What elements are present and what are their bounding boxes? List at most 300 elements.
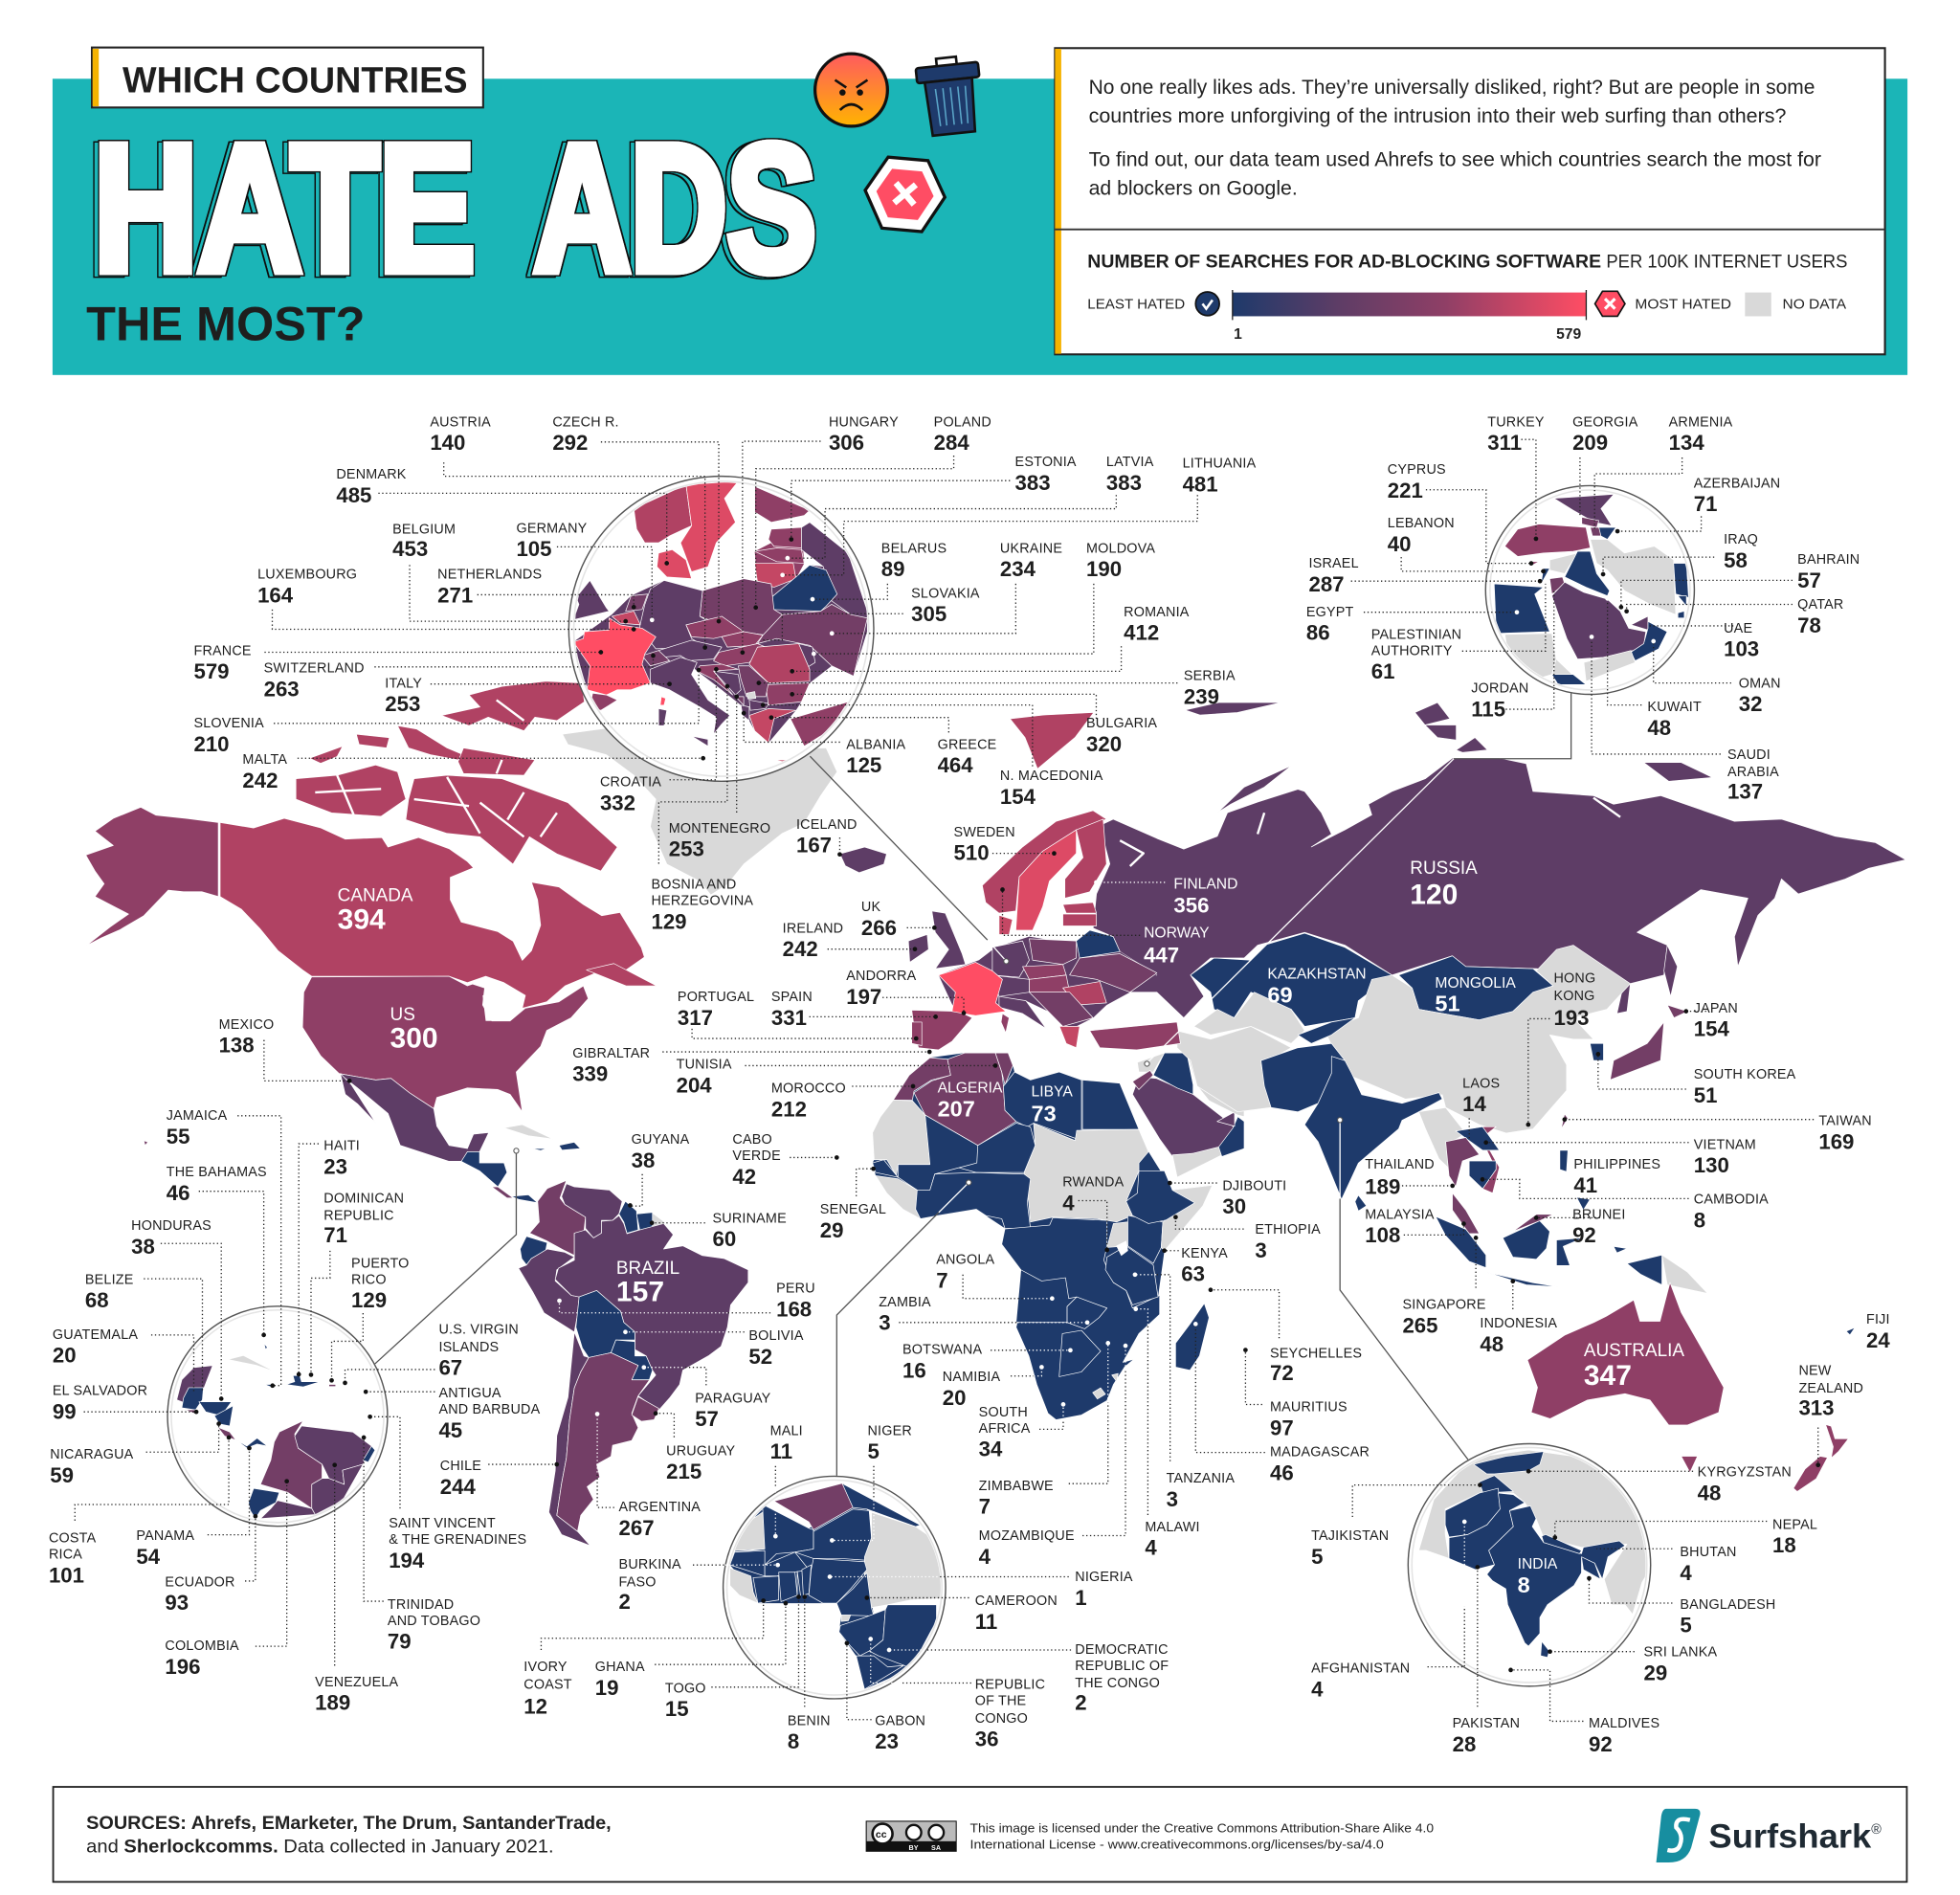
logo: Surfshark: ®: [1871, 1822, 1882, 1838]
label: Singapore: 265: [1402, 1313, 1437, 1337]
label: Montenegro: MONTENEGRO: [669, 821, 770, 836]
label: Bangladesh: BANGLADESH: [1680, 1597, 1776, 1613]
label: Puerto Rico: PUERTO: [351, 1256, 410, 1271]
label: Belarus: 89: [881, 557, 905, 581]
panel: intro and legend: No one really likes ads. They’re universally disliked, right? But are people in some: [1089, 77, 1815, 99]
label: Mexico: 138: [219, 1034, 255, 1058]
label: Afghanistan: 4: [1311, 1677, 1324, 1701]
header band: [53, 78, 1907, 375]
label: Honduras: 38: [131, 1235, 155, 1259]
label: Qatar: 78: [1797, 613, 1821, 637]
label: Guatemala: GUATEMALA: [53, 1327, 138, 1343]
label: Seychelles: 72: [1270, 1361, 1294, 1385]
label: Taiwan: 169: [1818, 1129, 1854, 1153]
label: Indonesia: 48: [1480, 1332, 1503, 1356]
label: Portugal: 317: [678, 1006, 713, 1030]
label: Hong Kong: 193: [1553, 1006, 1590, 1030]
label: Iraq: IRAQ: [1724, 532, 1758, 547]
label: Philippines: 41: [1573, 1173, 1597, 1197]
label: Australia: 347: [1584, 1360, 1632, 1392]
label: Kuwait: KUWAIT: [1647, 700, 1702, 715]
label: Chile: 244: [440, 1475, 476, 1499]
label: Cabo Verde: CABO: [732, 1132, 772, 1148]
label: Japan: 154: [1694, 1017, 1729, 1041]
label: Armenia: ARMENIA: [1669, 414, 1733, 430]
icon: angry face: [815, 54, 887, 126]
logo: Surfshark: Surfshark: [1708, 1817, 1872, 1855]
footer panel: [54, 1787, 1906, 1882]
label: Paraguay: PARAGUAY: [695, 1391, 771, 1406]
label: Niger: NIGER: [867, 1423, 912, 1438]
license text: [970, 1821, 1434, 1852]
label: Slovenia: 210: [193, 732, 230, 756]
map: Greenland, Iceland and Canadian Arctic: [296, 681, 886, 895]
label: Tunisia: 204: [677, 1074, 712, 1098]
label: UK: UK: [861, 900, 880, 915]
label: Costa Rica: COSTA: [49, 1531, 97, 1547]
label: Ghana: 19: [595, 1676, 618, 1700]
label: Thailand: THAILAND: [1365, 1157, 1435, 1172]
label: Brazil: BRAZIL: [616, 1259, 679, 1279]
label: Mali: 11: [770, 1439, 792, 1463]
label: Vietnam: 130: [1694, 1153, 1729, 1177]
heading: hate ads: ADS: [534, 107, 816, 308]
label: Albania: ALBANIA: [846, 737, 906, 752]
label: Rwanda: 4: [1062, 1191, 1075, 1215]
label: Republic of the Congo: OF THE: [975, 1693, 1026, 1708]
panel: intro and legend: 1: [1234, 326, 1242, 343]
label: Zimbabwe: ZIMBABWE: [979, 1479, 1054, 1494]
label: Greece: GREECE: [938, 737, 996, 752]
label: Burkina Faso: BURKINA: [619, 1557, 681, 1572]
map: Eurasia: [908, 758, 1905, 1293]
label: Ivory Coast: IVORY: [523, 1660, 568, 1675]
label: Libya: LIBYA: [1032, 1083, 1073, 1100]
label: Argentina: 267: [619, 1516, 655, 1540]
label: Niger: 5: [867, 1439, 880, 1463]
label: Tunisia: TUNISIA: [677, 1058, 732, 1073]
label: Tajikistan: TAJIKISTAN: [1311, 1528, 1389, 1544]
label: Argentina: ARGENTINA: [619, 1500, 701, 1515]
label: Denmark: 485: [336, 483, 371, 507]
label: Maldives: 92: [1589, 1732, 1613, 1756]
label: Belgium: 453: [392, 537, 428, 561]
label: Ethiopia: 3: [1255, 1238, 1267, 1262]
label: Gabon: GABON: [875, 1713, 925, 1728]
label: Dominican Republic: DOMINICAN: [323, 1191, 404, 1206]
label: US: US: [390, 1005, 415, 1025]
label: France: FRANCE: [193, 643, 252, 658]
label: The Bahamas: 46: [167, 1181, 189, 1205]
label: Jordan: JORDAN: [1471, 681, 1529, 697]
icon: creative commons badge: SA: [931, 1844, 941, 1852]
label: Belgium: BELGIUM: [392, 523, 456, 538]
inset: Middle East: [1485, 485, 1694, 695]
label: South Korea: SOUTH KOREA: [1694, 1067, 1796, 1082]
label: Iceland: 167: [796, 834, 832, 858]
label: Saint Vincent and the Grenadines: 194: [389, 1549, 425, 1572]
label: Chile: CHILE: [440, 1459, 481, 1474]
label: Burkina Faso: FASO: [619, 1574, 657, 1590]
label: Romania: 412: [1124, 621, 1159, 645]
label: Bolivia: 52: [748, 1345, 772, 1369]
label: Singapore: SINGAPORE: [1402, 1297, 1486, 1312]
label: Switzerland: 263: [264, 677, 300, 701]
label: Russia: 120: [1410, 879, 1458, 910]
label: Malawi: MALAWI: [1145, 1520, 1200, 1535]
label: Algeria: 207: [938, 1096, 975, 1121]
label: UAE: UAE: [1724, 621, 1752, 636]
label: Azerbaijan: 71: [1694, 492, 1717, 516]
label: Ecuador: 93: [165, 1591, 189, 1615]
label: Latvia: 383: [1106, 471, 1142, 495]
label: Slovakia: SLOVAKIA: [911, 586, 980, 601]
label: Bhutan: 4: [1680, 1561, 1692, 1585]
label: UK: 266: [861, 916, 897, 940]
label: Finland: FINLAND: [1173, 877, 1237, 893]
label: Tanzania: 3: [1167, 1487, 1178, 1511]
label: Senegal: 29: [820, 1218, 844, 1242]
label: Mali: MALI: [770, 1423, 803, 1438]
label: N. Macedonia: 154: [1000, 785, 1036, 809]
label: Kenya: KENYA: [1181, 1246, 1228, 1261]
panel: intro and legend: PER 100K INTERNET USERS: [1606, 251, 1847, 272]
label: Belize: 68: [85, 1288, 109, 1312]
label: Ukraine: 234: [1000, 557, 1036, 581]
label: Nepal: 18: [1772, 1533, 1796, 1557]
label: France: 579: [193, 659, 230, 683]
label: Costa Rica: 101: [49, 1563, 84, 1587]
label: Mexico: MEXICO: [219, 1017, 274, 1033]
map: Arctic islands: [1010, 702, 1712, 781]
panel: intro and legend: countries more unforgiving of the intrusion into their web surfing than others?: [1089, 105, 1786, 127]
label: Morocco: MOROCCO: [771, 1081, 846, 1097]
label: Colombia: 196: [165, 1655, 200, 1679]
label: Democratic Republic of the Congo: THE CONGO: [1075, 1676, 1160, 1691]
label: Poland: POLAND: [934, 414, 991, 430]
icon: creative commons badge: [866, 1821, 956, 1852]
label: Romania: ROMANIA: [1124, 605, 1190, 620]
label: Bosnia and Herzegovina: 129: [652, 909, 687, 933]
label: Cameroon: 11: [975, 1610, 997, 1634]
label: Hungary: HUNGARY: [829, 414, 899, 430]
label: Morocco: 212: [771, 1097, 807, 1121]
label: Germany: GERMANY: [516, 521, 588, 536]
label: Sweden: SWEDEN: [954, 825, 1015, 840]
label: Jordan: 115: [1471, 697, 1505, 721]
label: Thailand: 189: [1365, 1174, 1400, 1198]
label: Croatia: 332: [600, 791, 635, 814]
label: Slovenia: SLOVENIA: [193, 716, 264, 731]
label: Malta: MALTA: [242, 752, 287, 768]
label: Pakistan: 28: [1453, 1732, 1476, 1756]
heading: hate ads: HATE: [94, 107, 475, 308]
label: Palestinian Authority: 61: [1371, 659, 1394, 683]
label: Palestinian Authority: PALESTINIAN: [1371, 627, 1461, 642]
label: Jamaica: JAMAICA: [167, 1108, 228, 1124]
label: Finland: 356: [1173, 893, 1209, 917]
label: Bahrain: BAHRAIN: [1797, 552, 1860, 568]
label: Estonia: ESTONIA: [1015, 455, 1077, 470]
label: Democratic Republic of the Congo: 2: [1075, 1691, 1087, 1715]
label: Belize: BELIZE: [85, 1272, 134, 1287]
label: Hungary: 306: [829, 431, 864, 455]
label: Suriname: SURINAME: [713, 1211, 787, 1226]
label: New Zealand: NEW: [1798, 1364, 1832, 1379]
label: India: 8: [1518, 1572, 1530, 1597]
label: US: 300: [390, 1022, 438, 1054]
label: Norway: 447: [1144, 944, 1179, 968]
label: Sweden: 510: [954, 841, 990, 865]
label: Czech R.: 292: [552, 431, 588, 455]
connector lines to insets: [375, 693, 1571, 1476]
panel: intro and legend: NO DATA: [1782, 298, 1847, 313]
label: Rwanda: RWANDA: [1062, 1174, 1125, 1190]
label: Republic of the Congo: REPUBLIC: [975, 1677, 1045, 1692]
label: Colombia: COLOMBIA: [165, 1639, 239, 1654]
label: Montenegro: 253: [669, 837, 704, 861]
label: Malta: 242: [242, 769, 278, 792]
label: Mauritius: 97: [1270, 1416, 1294, 1439]
label: Malawi: 4: [1145, 1536, 1157, 1560]
license text: This image is licensed under the Creative Commons Attribution-Share Alike 4.0: [970, 1821, 1434, 1836]
label: The Bahamas: THE BAHAMAS: [167, 1165, 267, 1180]
panel: intro and legend: ad blockers on Google.: [1089, 178, 1298, 200]
label: Bahrain: 57: [1797, 568, 1821, 592]
label: Peru: 168: [776, 1297, 812, 1321]
heading: which countries: [92, 48, 483, 107]
label: Senegal: SENEGAL: [820, 1202, 886, 1217]
label: Iraq: 58: [1724, 548, 1748, 572]
label: Netherlands: NETHERLANDS: [437, 568, 542, 583]
label: Pakistan: PAKISTAN: [1453, 1716, 1520, 1731]
leader lines and dots: [75, 439, 1818, 1721]
label: Afghanistan: AFGHANISTAN: [1311, 1661, 1410, 1677]
label: Tanzania: TANZANIA: [1167, 1471, 1235, 1486]
label: Seychelles: SEYCHELLES: [1270, 1346, 1362, 1361]
label: Jamaica: 55: [167, 1125, 189, 1148]
label: U.S. Virgin Islands: 67: [438, 1356, 462, 1380]
label: Tajikistan: 5: [1311, 1545, 1323, 1569]
label: Denmark: DENMARK: [336, 467, 407, 482]
label: Suriname: 60: [713, 1227, 736, 1251]
label: Libya: 73: [1032, 1102, 1057, 1126]
label: Republic of the Congo: CONGO: [975, 1711, 1028, 1727]
label: Democratic Republic of the Congo: DEMOCRATIC: [1075, 1642, 1169, 1658]
label: Greece: 464: [938, 753, 973, 777]
label: Luxembourg: 164: [257, 584, 294, 608]
map: North America: [86, 807, 657, 1203]
label: Mongolia: MONGOLIA: [1435, 975, 1516, 992]
label: Brunei: 92: [1572, 1223, 1596, 1247]
label: Uruguay: URUGUAY: [666, 1443, 736, 1459]
label: Djibouti: 30: [1222, 1194, 1246, 1218]
map: Africa and Arabia: [873, 1053, 1244, 1419]
label: Austria: AUSTRIA: [430, 414, 491, 430]
label: Bangladesh: 5: [1680, 1614, 1692, 1638]
label: Saudi Arabia: SAUDI: [1727, 747, 1771, 763]
label: Georgia: GEORGIA: [1572, 414, 1638, 430]
label: Ivory Coast: COAST: [523, 1677, 572, 1692]
label: Lebanon: LEBANON: [1388, 516, 1455, 531]
label: Estonia: 383: [1015, 471, 1051, 495]
label: Malaysia: MALAYSIA: [1365, 1207, 1435, 1222]
map: South America: [519, 1180, 748, 1546]
label: Gibraltar: 339: [572, 1062, 608, 1086]
label: Guyana: 38: [632, 1148, 655, 1172]
label: Norway: NORWAY: [1144, 925, 1210, 942]
label: Kazakhstan: KAZAKHSTAN: [1267, 967, 1367, 983]
label: New Zealand: 313: [1798, 1395, 1835, 1419]
label: Zambia: ZAMBIA: [879, 1295, 931, 1310]
label: El Salvador: EL SALVADOR: [53, 1384, 147, 1399]
label: Slovakia: 305: [911, 602, 947, 626]
label: Fiji: FIJI: [1866, 1312, 1890, 1327]
label: South Africa: 34: [979, 1438, 1003, 1461]
label: Angola: 7: [936, 1268, 948, 1292]
label: Benin: BENIN: [788, 1713, 831, 1728]
label: Japan: JAPAN: [1694, 1001, 1738, 1016]
label: Angola: ANGOLA: [936, 1252, 995, 1267]
inset: South Asia: [1408, 1444, 1651, 1686]
icon: trash can: [915, 55, 985, 137]
label: Belarus: BELARUS: [881, 541, 947, 556]
label: Croatia: CROATIA: [600, 775, 661, 791]
label: Nigeria: 1: [1075, 1586, 1087, 1610]
label: Andorra: 197: [846, 985, 881, 1009]
label: Spain: 331: [771, 1006, 807, 1030]
inset: Europe: [568, 477, 874, 781]
label: Bhutan: BHUTAN: [1680, 1545, 1737, 1560]
label: Antigua and Barbuda: ANTIGUA: [438, 1386, 501, 1401]
label: Zambia: 3: [879, 1311, 891, 1335]
label: Guyana: GUYANA: [632, 1132, 690, 1148]
panel: intro and legend: MOST HATED: [1635, 298, 1731, 313]
label: Andorra: ANDORRA: [846, 969, 917, 984]
heading: which countries: WHICH COUNTRIES: [122, 61, 468, 101]
label: Mozambique: MOZAMBIQUE: [979, 1528, 1075, 1544]
label: South Africa: SOUTH: [979, 1405, 1028, 1420]
label: Puerto Rico: RICO: [351, 1272, 387, 1287]
label: Mongolia: 51: [1435, 992, 1460, 1016]
label: Cambodia: CAMBODIA: [1694, 1193, 1769, 1208]
label: UAE: 103: [1724, 637, 1759, 661]
label: Israel: ISRAEL: [1308, 556, 1359, 571]
label: Mozambique: 4: [979, 1545, 991, 1569]
label: U.S. Virgin Islands: U.S. VIRGIN: [438, 1323, 519, 1338]
label: Kyrgyzstan: KYRGYZSTAN: [1698, 1464, 1792, 1480]
label: New Zealand: ZEALAND: [1798, 1381, 1863, 1396]
label: Moldova: MOLDOVA: [1086, 541, 1155, 556]
panel: intro and legend: NUMBER OF SEARCHES FOR AD-BLOCKING SOFTWARE: [1087, 251, 1601, 272]
label: Indonesia: INDONESIA: [1480, 1316, 1557, 1331]
panel: intro and legend: [1055, 48, 1885, 354]
label: Nicaragua: 59: [50, 1463, 74, 1487]
label: Switzerland: SWITZERLAND: [264, 661, 365, 677]
icon: creative commons badge: cc: [876, 1830, 887, 1840]
label: Philippines: PHILIPPINES: [1573, 1157, 1660, 1172]
label: Ireland: 242: [783, 937, 818, 961]
label: Portugal: PORTUGAL: [678, 990, 754, 1005]
label: Venezuela: VENEZUELA: [315, 1675, 399, 1690]
label: Madagascar: MADAGASCAR: [1270, 1445, 1370, 1460]
label: Maldives: MALDIVES: [1589, 1716, 1659, 1731]
label: Antigua and Barbuda: 45: [438, 1418, 462, 1442]
sources text: SOURCES: Ahrefs, EMarketer, The Drum, SantanderTrade,: [86, 1813, 612, 1834]
label: Trinidad and Tobago: 79: [388, 1630, 412, 1654]
label: Israel: 287: [1308, 572, 1345, 596]
label: Haiti: 23: [323, 1154, 347, 1178]
sources text: [86, 1813, 612, 1858]
label: Ethiopia: ETHIOPIA: [1255, 1222, 1321, 1237]
label: Sri Lanka: 29: [1644, 1661, 1667, 1684]
label: Cambodia: 8: [1694, 1209, 1705, 1233]
label: Togo: TOGO: [665, 1681, 706, 1696]
label: Spain: SPAIN: [771, 990, 813, 1005]
label: Netherlands: 271: [437, 584, 473, 608]
label: Panama: PANAMA: [136, 1528, 194, 1544]
label: Oman: 32: [1739, 692, 1762, 716]
label: Benin: 8: [788, 1729, 799, 1753]
heading: hate ads: [94, 107, 816, 308]
label: Germany: 105: [516, 537, 551, 561]
label: Hong Kong: KONG: [1553, 989, 1595, 1004]
label: Lithuania: 481: [1183, 472, 1218, 496]
panel: intro and legend: 579: [1556, 326, 1582, 343]
label: Georgia: 209: [1572, 431, 1608, 455]
label: Dominican Republic: 71: [323, 1223, 347, 1247]
label: Cameroon: CAMEROON: [975, 1594, 1058, 1609]
label: Madagascar: 46: [1270, 1460, 1294, 1484]
label: Taiwan: TAIWAN: [1818, 1113, 1872, 1128]
label: Latvia: LATVIA: [1106, 455, 1154, 470]
label: Albania: 125: [846, 753, 881, 777]
logo: Surfshark: [1657, 1809, 1882, 1862]
label: Poland: 284: [934, 431, 969, 455]
label: Sri Lanka: SRI LANKA: [1644, 1645, 1718, 1661]
icon: stop hexagon: [862, 155, 947, 234]
label: Ivory Coast: 12: [523, 1695, 547, 1719]
label: Fiji: 24: [1866, 1328, 1890, 1352]
label: Brunei: BRUNEI: [1572, 1207, 1626, 1222]
label: Peru: PERU: [776, 1281, 815, 1296]
label: Azerbaijan: AZERBAIJAN: [1694, 476, 1780, 491]
label: Botswana: BOTSWANA: [902, 1342, 982, 1357]
label: Egypt: EGYPT: [1306, 605, 1354, 620]
label: South Africa: AFRICA: [979, 1421, 1031, 1437]
label: Cyprus: 221: [1388, 479, 1423, 502]
label: Oman: OMAN: [1739, 676, 1781, 691]
label: Nigeria: NIGERIA: [1075, 1570, 1133, 1585]
label: Kazakhstan: 69: [1267, 982, 1293, 1007]
label: India: INDIA: [1518, 1556, 1558, 1572]
label: Laos: 14: [1462, 1092, 1486, 1116]
label: Saint Vincent and the Grenadines: SAINT VINCENT: [389, 1516, 496, 1531]
label: Austria: 140: [430, 431, 465, 455]
label: Lebanon: 40: [1388, 532, 1411, 556]
label: Bosnia and Herzegovina: HERZEGOVINA: [652, 894, 753, 909]
label: Czech R.: CZECH R.: [552, 414, 619, 430]
label: Moldova: 190: [1086, 557, 1122, 581]
license text: International License - www.creativecommons.org/licenses/by-sa/4.0: [970, 1838, 1384, 1852]
label: Costa Rica: RICA: [49, 1548, 82, 1563]
label: Uruguay: 215: [666, 1460, 702, 1483]
label: Bolivia: BOLIVIA: [748, 1328, 804, 1344]
label: Mauritius: MAURITIUS: [1270, 1400, 1348, 1416]
label: Serbia: SERBIA: [1184, 669, 1236, 684]
label: Bulgaria: BULGARIA: [1086, 716, 1157, 731]
label: Gabon: 23: [875, 1729, 899, 1753]
